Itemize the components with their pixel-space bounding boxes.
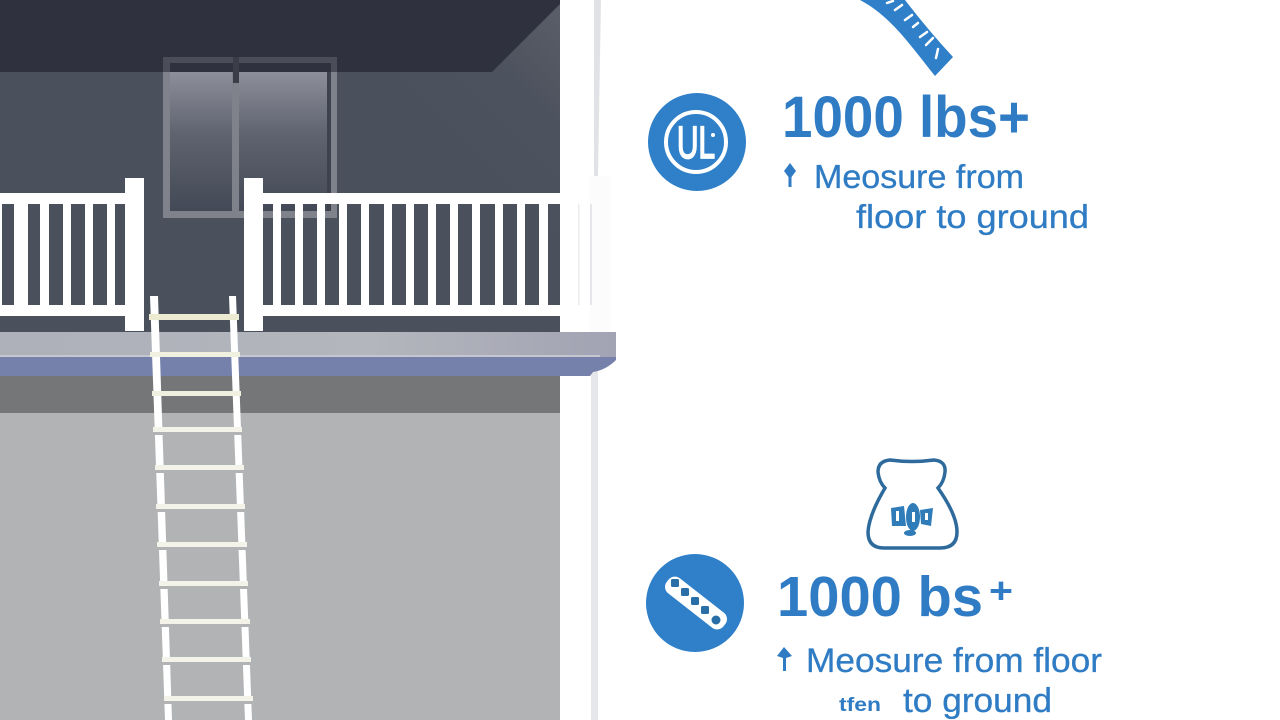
window bbox=[163, 57, 337, 218]
panel: building scene bbox=[0, 0, 616, 720]
icon: UL badge bbox=[648, 93, 746, 191]
text: measure line one: Meosure from floor bbox=[806, 642, 1102, 680]
upper wall bbox=[0, 0, 560, 332]
text: measure line two: floor to ground bbox=[856, 198, 1089, 235]
icon: pin bbox=[777, 647, 792, 671]
text: measure line one: Meosure from bbox=[814, 158, 1024, 195]
text: measure line two: to ground bbox=[903, 682, 1052, 720]
heading: 1000 lbs+: 1000 lbs+ bbox=[782, 85, 1030, 150]
right white column bbox=[560, 0, 595, 720]
lower wall bbox=[0, 413, 560, 720]
icon: power strip badge bbox=[646, 554, 744, 652]
band under balcony bbox=[0, 376, 560, 413]
panel: second stat bbox=[646, 554, 1102, 720]
panel: first stat bbox=[648, 85, 1089, 235]
icon: pin bbox=[784, 163, 796, 187]
icon: weight bag bbox=[868, 460, 957, 548]
left railing bbox=[0, 178, 144, 331]
ladder bbox=[149, 296, 253, 720]
text: small label: tfen bbox=[839, 695, 881, 716]
column edge line bbox=[594, 0, 601, 176]
icon: ruler bbox=[860, 0, 953, 76]
icon: UL badge: UL bbox=[677, 117, 715, 168]
balcony slab bbox=[0, 332, 616, 376]
superscript plus: + bbox=[989, 570, 1013, 611]
heading: 1000 bs+: 1000 bs bbox=[777, 565, 983, 629]
lower column edge line bbox=[591, 370, 598, 720]
ceiling soffit bbox=[0, 0, 560, 72]
right railing bbox=[244, 176, 610, 332]
